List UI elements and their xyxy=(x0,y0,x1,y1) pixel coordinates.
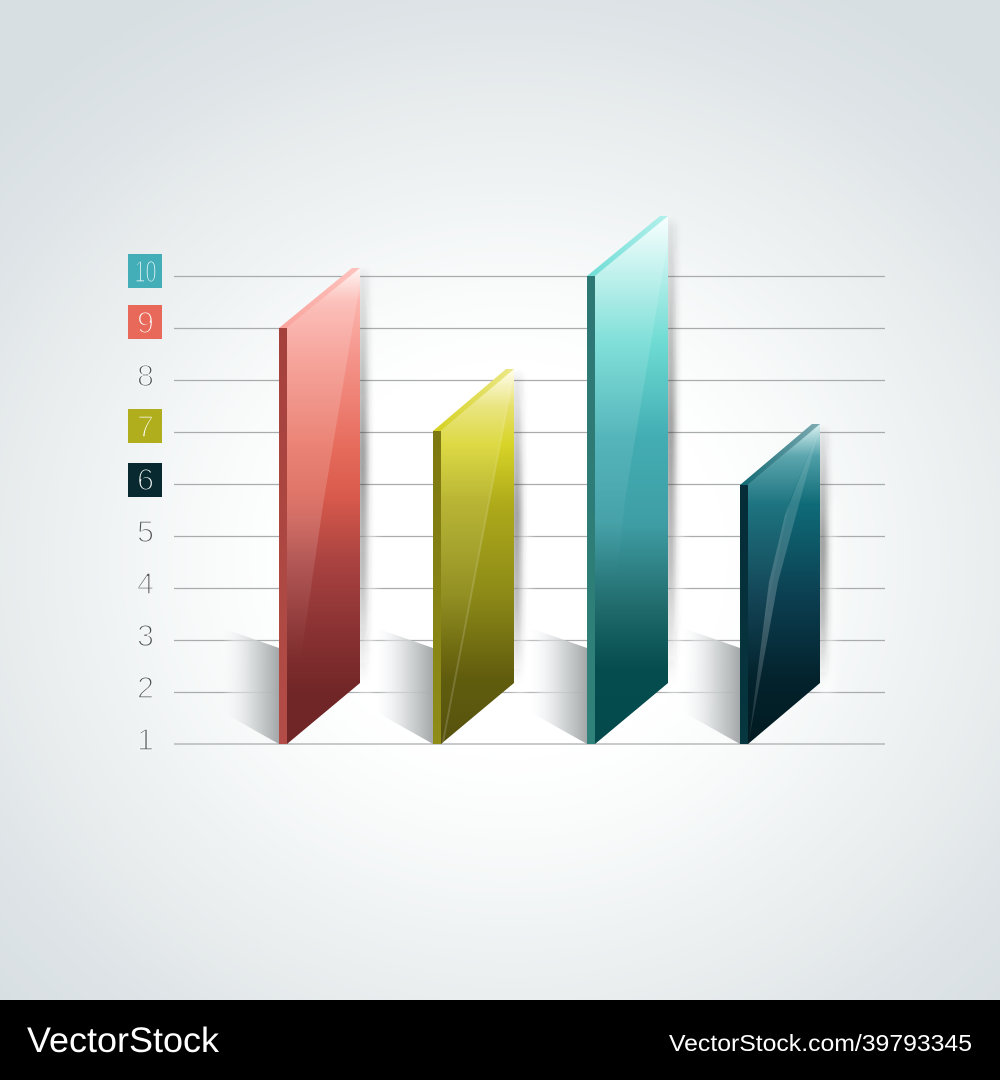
bar 4: dark teal, value 6 xyxy=(683,424,832,744)
label 7 xyxy=(128,409,162,444)
label 9: 9 xyxy=(137,305,154,340)
grid lines xyxy=(174,276,885,744)
label 8: 8 xyxy=(137,358,154,393)
image id: VectorStock.com/39793345 xyxy=(669,1030,972,1056)
bar 2: olive, value 7 xyxy=(376,369,526,744)
bar 3: teal, value 10 xyxy=(530,216,680,744)
label 4: 4 xyxy=(137,566,154,601)
label 9 xyxy=(128,305,162,340)
label 6 xyxy=(128,462,162,497)
label 1: 1 xyxy=(137,722,154,757)
brand name: VectorStock xyxy=(27,1021,220,1060)
bar 1: red, value 9 xyxy=(222,268,372,744)
chart xyxy=(128,216,885,757)
label 3: 3 xyxy=(137,618,154,653)
label 5: 5 xyxy=(137,514,154,549)
footer band xyxy=(0,1000,1000,1080)
label 6: 6 xyxy=(137,462,154,497)
label 10 xyxy=(128,254,162,289)
y axis scale xyxy=(128,254,162,757)
label 2: 2 xyxy=(137,670,154,705)
label 10: 10 xyxy=(134,254,156,289)
label 7: 7 xyxy=(137,409,154,444)
